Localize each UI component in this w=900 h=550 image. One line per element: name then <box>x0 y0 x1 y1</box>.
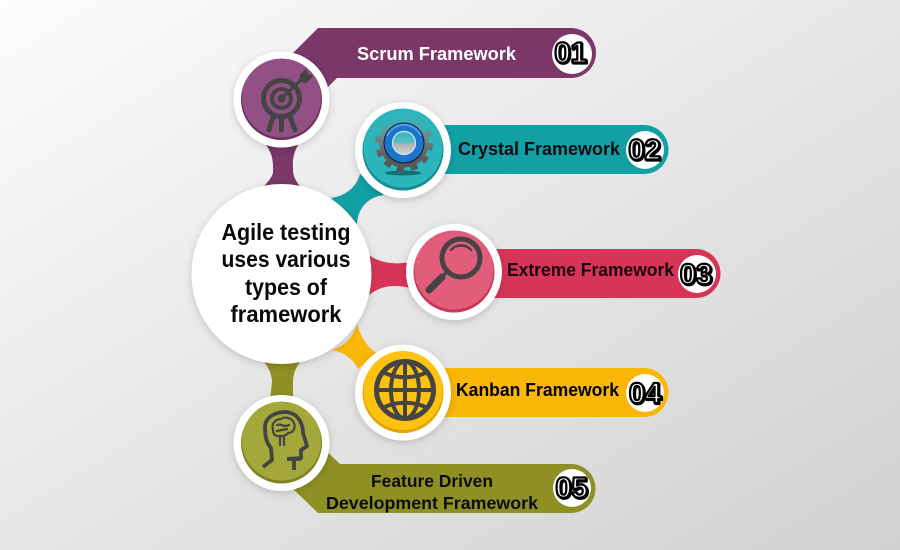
bar: extreme framework <box>480 249 720 298</box>
central heading: uses various <box>222 246 350 272</box>
label: crystal framework: Crystal Framework <box>458 138 621 159</box>
number badge 05: 05 <box>555 472 588 504</box>
label: feature driven development framework: Feature Driven <box>371 471 493 491</box>
connector: crystal <box>331 174 384 224</box>
icon: magnifying glass <box>429 239 480 290</box>
medallion: scrum target <box>234 52 330 148</box>
label: scrum framework: Scrum Framework <box>357 43 517 64</box>
icon: gear with blue ring <box>378 117 430 176</box>
number badge 03: 03 <box>680 259 712 291</box>
label: extreme framework: Extreme Framework <box>507 259 675 280</box>
medallion: crystal gear <box>355 102 451 198</box>
connector: feature driven <box>262 360 302 400</box>
number badge 01 <box>552 34 592 74</box>
number badge 01: 01 <box>554 38 587 70</box>
central heading: Agile testing <box>222 219 350 245</box>
bar: kanban framework <box>430 368 668 417</box>
central circle <box>192 184 372 364</box>
medallion: feature driven head <box>234 395 330 491</box>
label: feature driven development framework: Development Framework <box>326 493 538 513</box>
icon: head with brain <box>263 412 307 470</box>
connector: kanban <box>332 324 376 369</box>
bar: scrum framework <box>290 28 596 90</box>
icon: globe <box>376 362 434 418</box>
label: kanban framework: Kanban Framework <box>456 379 620 400</box>
bar: crystal framework <box>430 125 668 174</box>
bar: feature driven development framework <box>290 450 596 513</box>
central heading: types of <box>245 274 327 300</box>
central heading: framework <box>230 301 342 327</box>
connector: scrum <box>263 145 301 187</box>
medallion: kanban globe <box>355 344 451 440</box>
medallion: extreme magnifier <box>406 224 502 320</box>
number badge 04: 04 <box>629 378 661 410</box>
connector: extreme <box>369 255 410 295</box>
icon: target with arrow <box>264 70 312 130</box>
number badge 02: 02 <box>628 134 661 166</box>
